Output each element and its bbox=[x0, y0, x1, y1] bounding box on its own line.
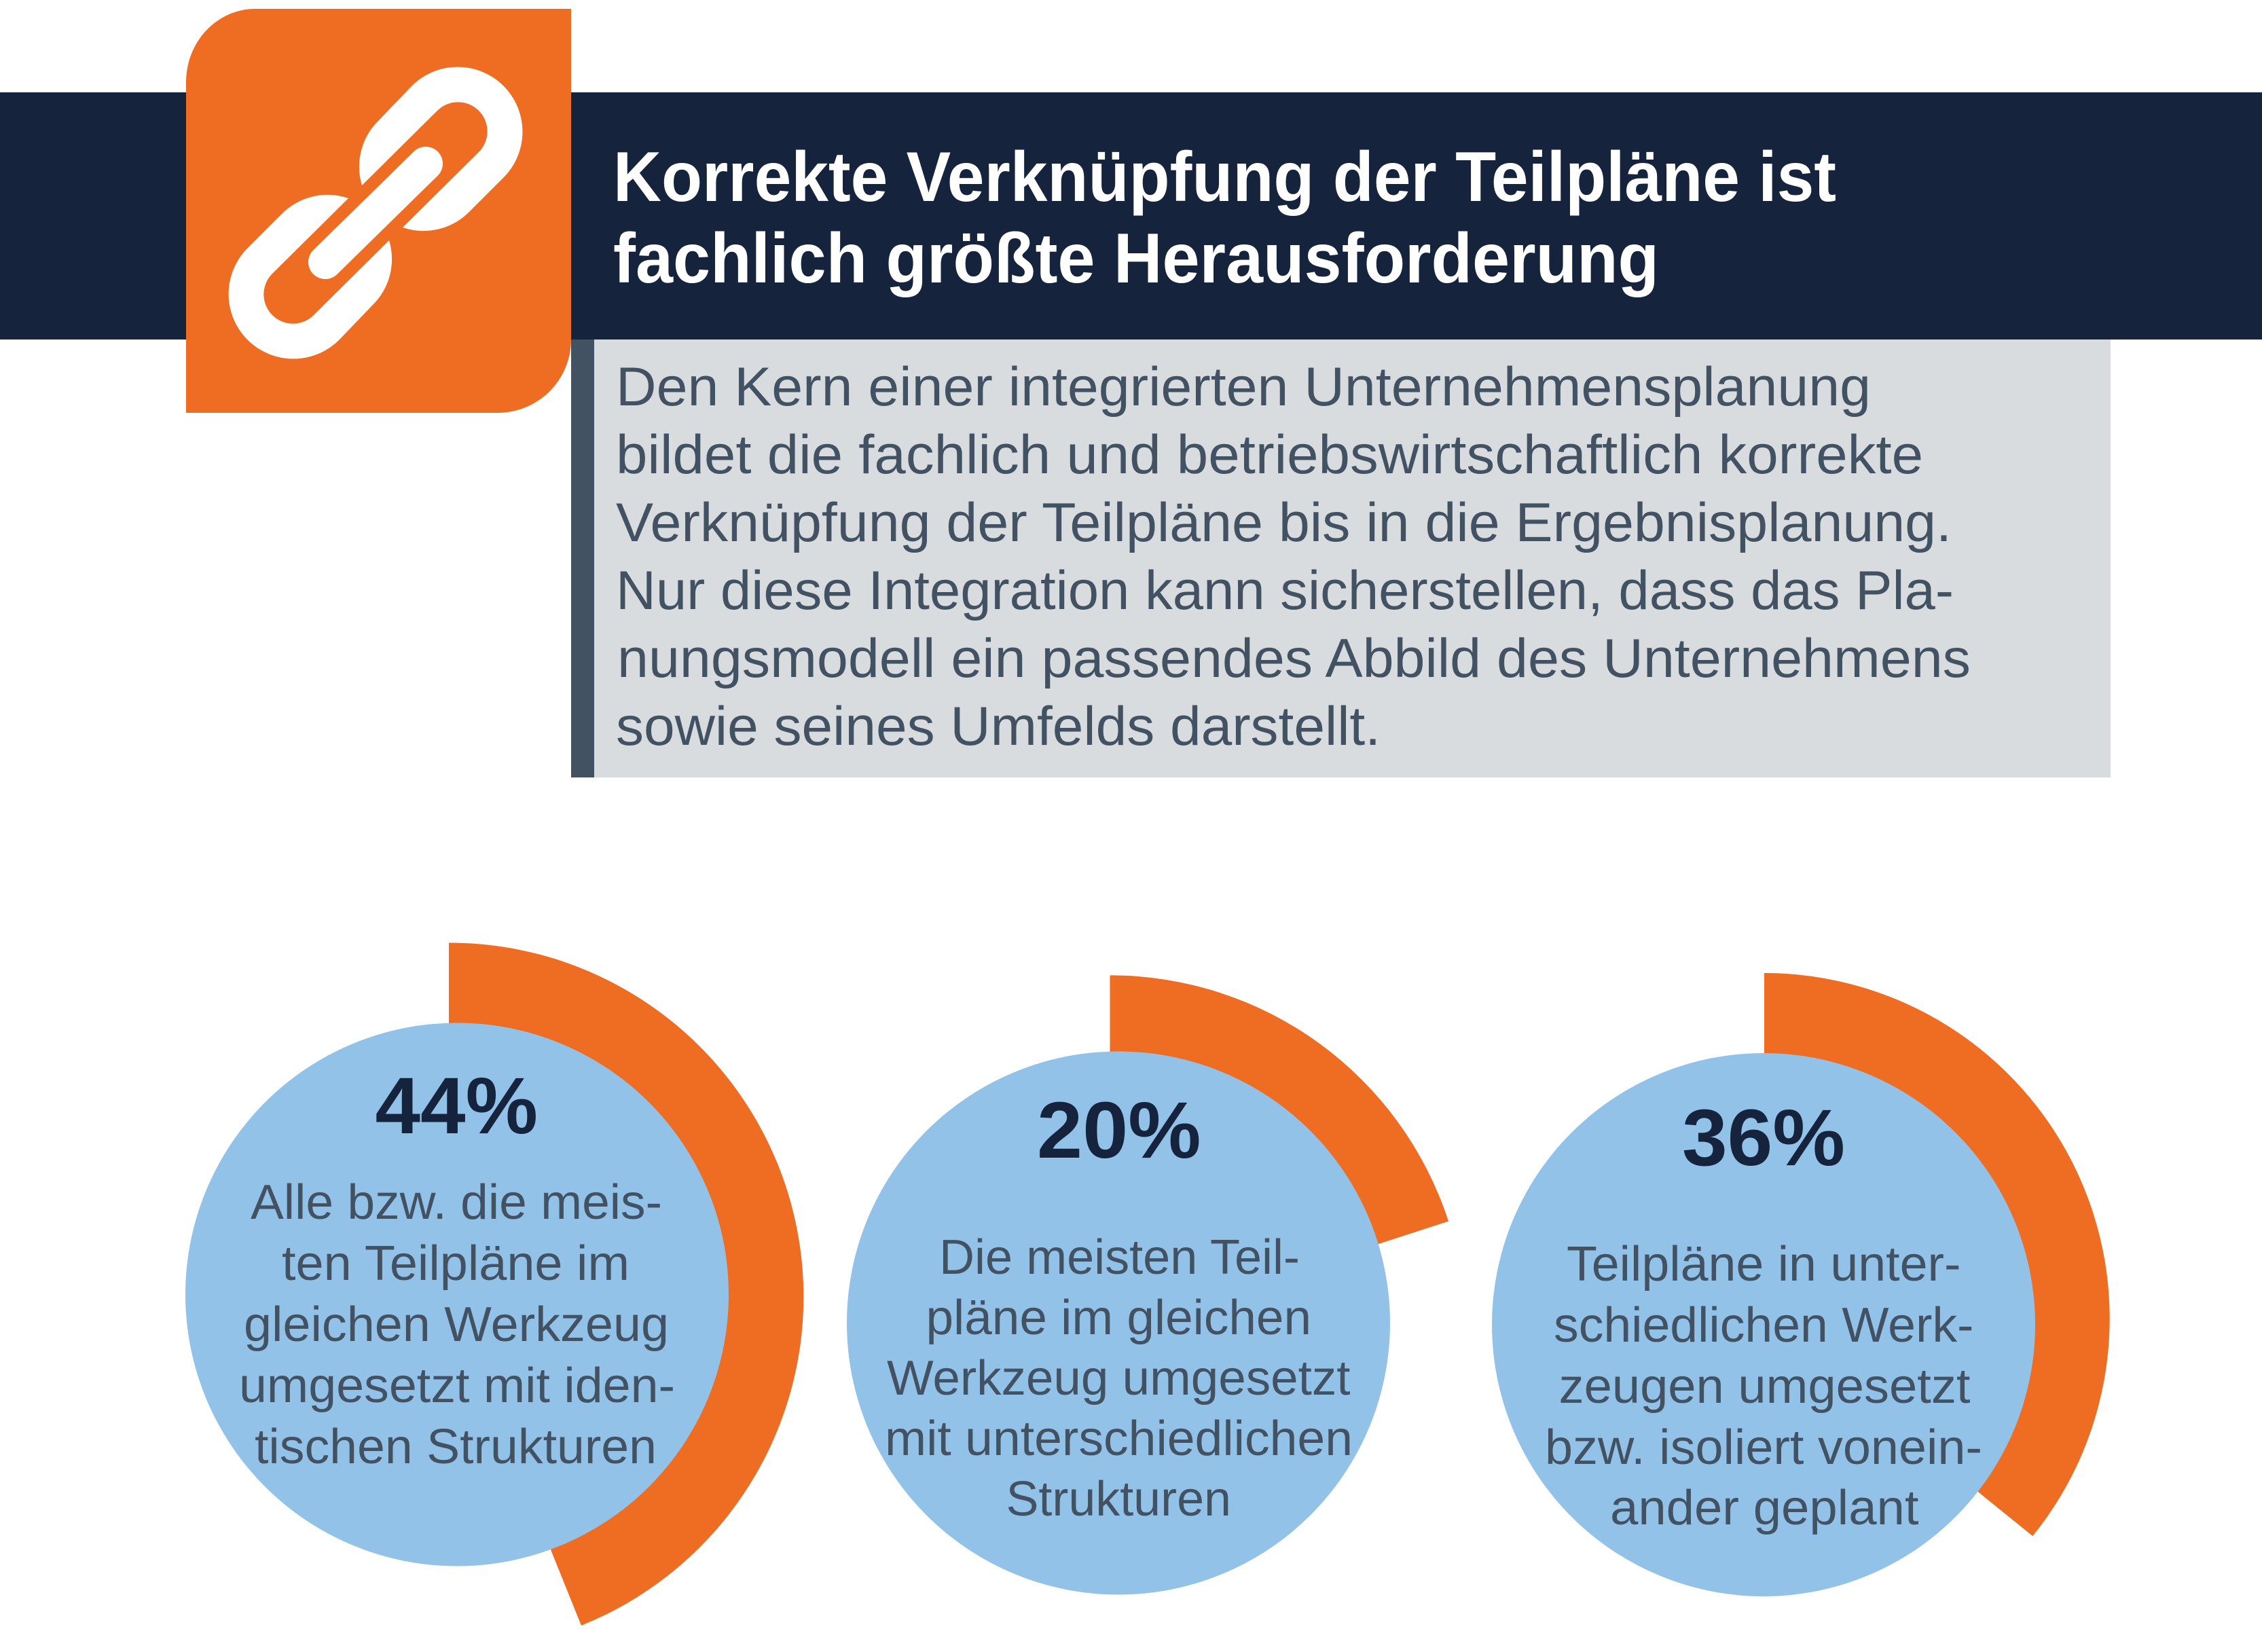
description: ten Teilpläne im bbox=[282, 1236, 630, 1291]
description bbox=[885, 1230, 1353, 1526]
description: bzw. isoliert vonein- bbox=[1545, 1420, 1982, 1475]
body text bbox=[616, 356, 1971, 757]
icon: lower link bbox=[229, 195, 392, 359]
icon: chain link on orange tile bbox=[186, 9, 571, 413]
circle bbox=[185, 1023, 729, 1566]
body text: Den Kern einer integrierten Unternehmensplanung bbox=[616, 356, 1871, 418]
description: Werkzeug umgesetzt bbox=[887, 1351, 1350, 1406]
body text: sowie seines Umfelds darstellt. bbox=[616, 696, 1381, 757]
description: Strukturen bbox=[1006, 1472, 1231, 1526]
body text: Nur diese Integration kann sicherstellen, dass das Pla- bbox=[616, 560, 1954, 621]
description: Die meisten Teil- bbox=[939, 1230, 1300, 1285]
body text: bildet die fachlich und betriebswirtschaftlich korrekte bbox=[616, 424, 1923, 485]
stat: 44% bbox=[185, 942, 803, 1626]
panel background bbox=[594, 339, 2111, 777]
stat: 36% bbox=[1492, 973, 2110, 1596]
icon: centre bar bbox=[325, 164, 426, 262]
circle bbox=[847, 1051, 1390, 1594]
icon tile bbox=[186, 9, 571, 413]
donut segment 20% bbox=[1110, 975, 1448, 1332]
value: 36% bbox=[1682, 1093, 1845, 1183]
description: tischen Strukturen bbox=[255, 1420, 657, 1474]
description: pläne im gleichen bbox=[926, 1291, 1311, 1345]
body text: Verknüpfung der Teilpläne bis in die Ergebnisplanung. bbox=[616, 492, 1952, 553]
title: Korrekte Verknüpfung der Teilpläne ist bbox=[613, 138, 1836, 217]
description: umgesetzt mit iden- bbox=[239, 1359, 675, 1413]
circle bbox=[1492, 1053, 2035, 1596]
description: gleichen Werkzeug bbox=[244, 1298, 669, 1352]
header band bbox=[0, 92, 2262, 339]
description: ander geplant bbox=[1610, 1481, 1919, 1535]
description bbox=[239, 1175, 675, 1474]
description: zeugen umgesetzt bbox=[1559, 1359, 1971, 1414]
description: Teilpläne in unter- bbox=[1567, 1237, 1961, 1291]
donut segment 36% bbox=[1764, 973, 2110, 1536]
stat: 20% bbox=[847, 975, 1448, 1594]
description: Alle bzw. die meis- bbox=[251, 1175, 662, 1230]
panel accent bar bbox=[571, 339, 594, 777]
value: 20% bbox=[1037, 1086, 1201, 1175]
title: fachlich größte Herausforderung bbox=[613, 219, 1659, 298]
title bbox=[613, 138, 1836, 298]
description: schiedlichen Werk- bbox=[1554, 1298, 1973, 1353]
body text: nungsmodell ein passendes Abbild des Unternehmens bbox=[617, 628, 1971, 689]
description bbox=[1545, 1237, 1982, 1535]
donut segment 44% bbox=[449, 942, 803, 1626]
body text panel bbox=[571, 339, 2111, 777]
description: mit unterschiedlichen bbox=[885, 1412, 1353, 1466]
icon: upper link bbox=[359, 67, 522, 231]
value: 44% bbox=[375, 1061, 538, 1151]
